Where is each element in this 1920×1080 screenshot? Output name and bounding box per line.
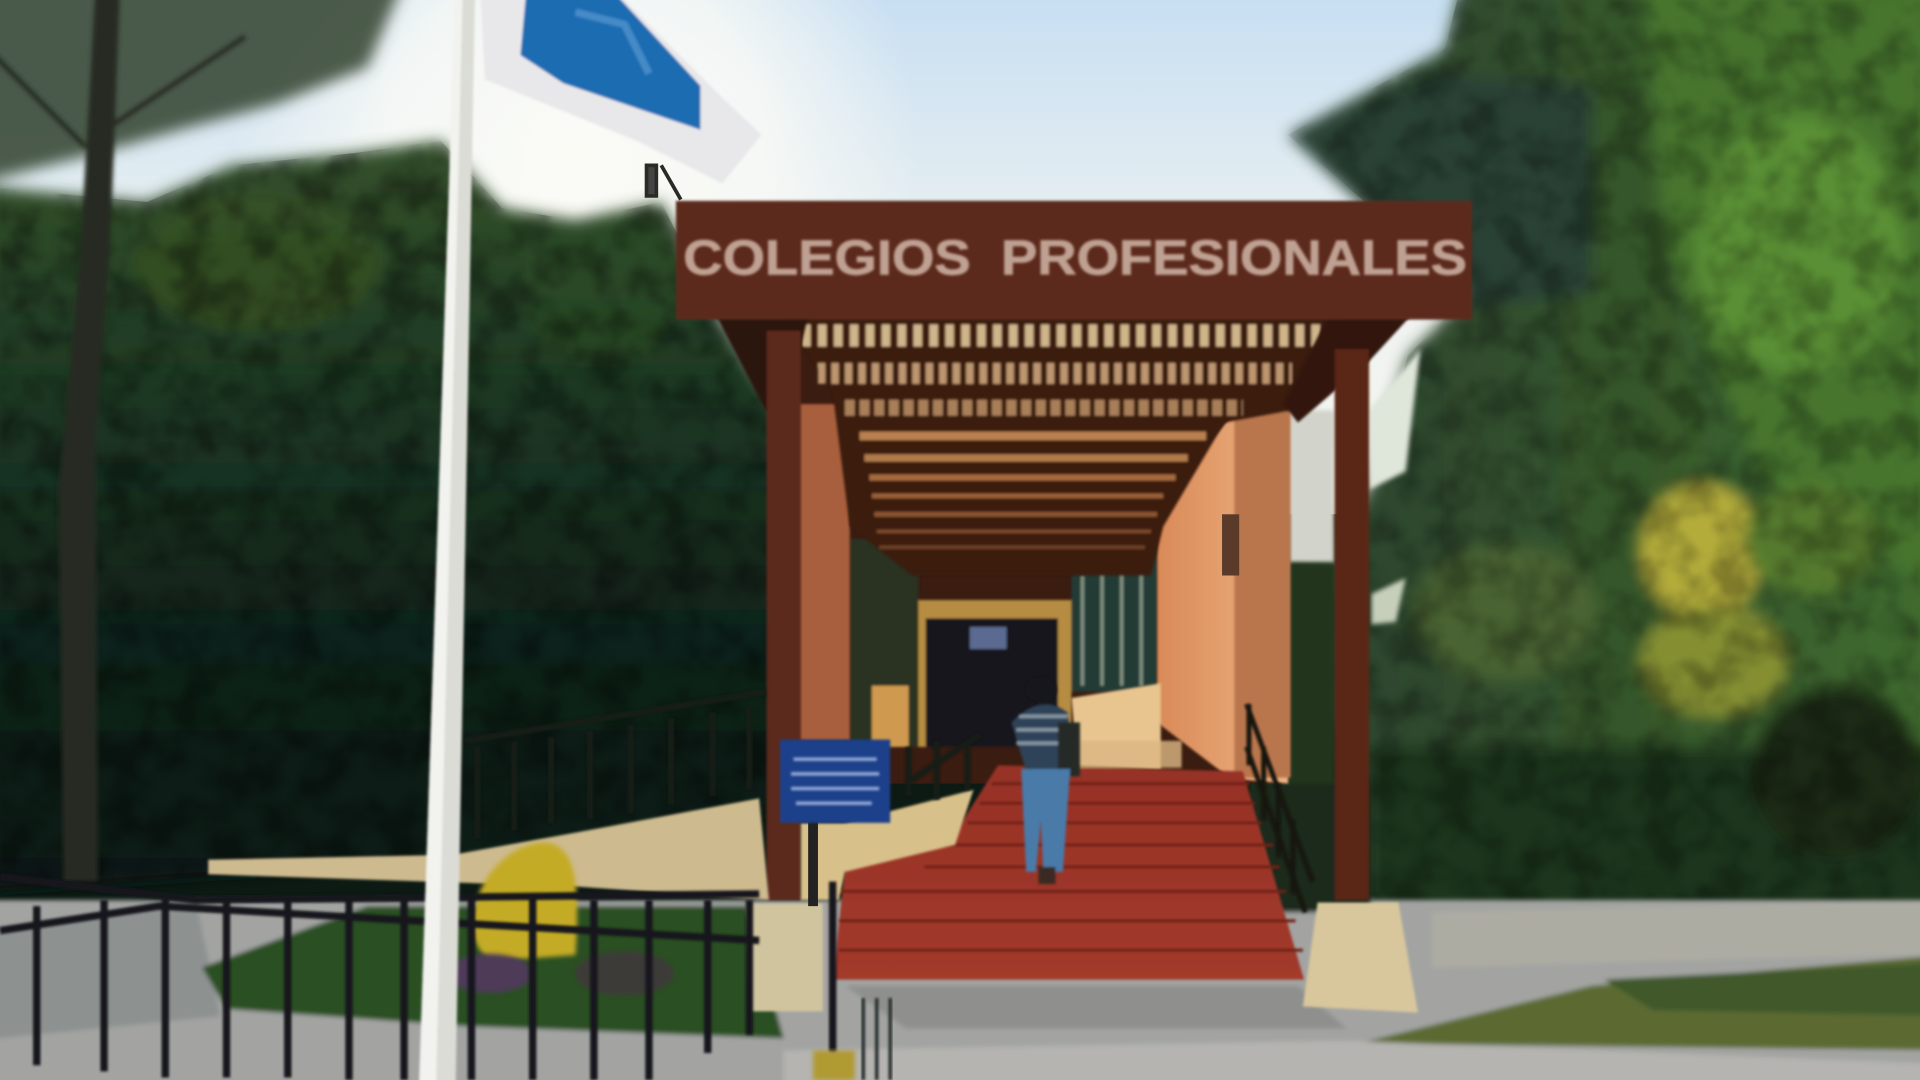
right post — [1335, 349, 1369, 900]
right trees — [1288, 0, 1920, 918]
tan wall beside stairs — [801, 790, 973, 900]
yellow post base — [813, 1051, 855, 1080]
sign board — [676, 201, 1472, 320]
left trees — [0, 0, 784, 894]
flag bracket — [647, 165, 681, 200]
left post — [767, 331, 801, 900]
pillar base left of stairs — [747, 904, 823, 1011]
front railing — [0, 877, 833, 1080]
green gap behind post — [1288, 563, 1335, 784]
entrance building — [716, 312, 1411, 900]
sunlit corridor wall — [1071, 683, 1161, 769]
yellow bollard — [473, 842, 577, 961]
low wall left of stairs — [208, 798, 769, 900]
wall lamp — [1222, 514, 1239, 576]
ground base — [0, 514, 1920, 1080]
right roof bracket — [1283, 316, 1411, 422]
left upper railing — [465, 692, 980, 839]
pale building behind post — [1288, 410, 1335, 563]
ground — [0, 778, 1920, 1080]
far door — [850, 539, 1157, 747]
stairs — [833, 741, 1304, 980]
blue notice sign — [780, 740, 890, 906]
right stair railing — [1247, 704, 1313, 912]
left brick column — [798, 404, 850, 741]
corridor interior — [784, 312, 1288, 784]
pergola slats — [784, 316, 1341, 576]
left tree trunk — [0, 0, 245, 882]
sky — [0, 0, 1920, 514]
sign text: COLEGIOS PROFESIONALES — [683, 231, 1467, 285]
right wall — [1157, 404, 1288, 784]
sky gap on right — [1369, 349, 1420, 490]
right brick part — [1234, 410, 1291, 778]
flagpole — [419, 0, 475, 1080]
small fence bars — [863, 998, 890, 1080]
flowers — [447, 951, 673, 996]
flag — [480, 0, 762, 184]
left roof bracket — [716, 316, 808, 416]
person climbing stairs — [1011, 677, 1080, 884]
concrete plinth — [1303, 902, 1418, 1013]
